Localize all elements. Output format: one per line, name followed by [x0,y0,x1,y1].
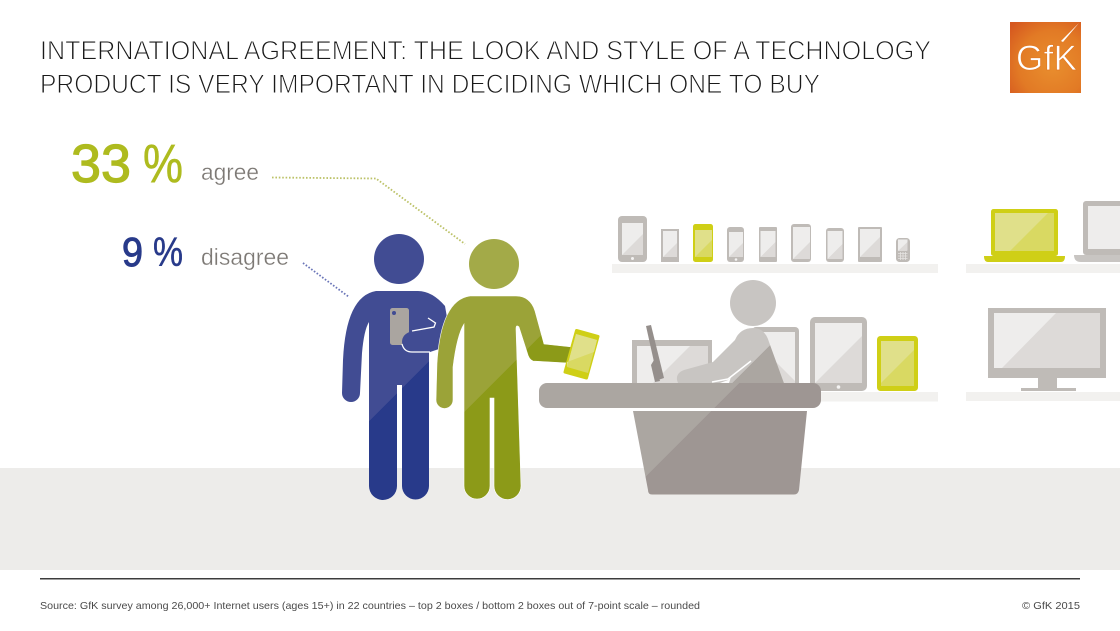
device: green laptop [984,209,1065,262]
stat: 33% agree: agree [201,159,259,185]
green person's phone [565,330,598,378]
GfK logo: GfK [1016,39,1077,78]
counter base [633,411,807,494]
counter top [539,383,821,408]
scanner [646,325,664,382]
stat: 9% disagree [122,229,289,275]
heading: PRODUCT IS VERY IMPORTANT IN DECIDING WHICH ONE TO BUY [40,69,820,99]
GfK logo [1010,22,1081,93]
lower shelf [800,392,938,402]
device: grey laptop [1074,201,1120,262]
footer rule [40,578,1080,580]
counter [539,383,821,494]
copyright: © GfK 2015 [1022,600,1080,612]
right lower shelf: monitor [966,308,1120,401]
clerk torso [728,328,785,386]
heading [40,36,931,99]
device: phablet [858,227,882,262]
device: phone 6 [791,224,811,262]
dotted leader: agree [272,178,465,244]
device: phone 7 [826,228,844,262]
clerk figure [677,280,785,386]
stat: 9% disagree: disagree [201,244,289,270]
device: keypad phone [896,238,910,262]
blue body [342,291,452,500]
upper shelf: phones [612,216,938,273]
green tablet [877,336,918,391]
blue forearm [402,318,448,352]
green person: agree [436,239,598,500]
right upper shelf: laptops [966,201,1120,273]
clerk arm [677,338,752,386]
device: phone 4 [727,227,744,262]
device: phone 5 [759,227,777,262]
blue person's phone [390,308,409,345]
stat: 9% disagree: 9 [122,229,143,275]
source note: Source: GfK survey among 26,000+ Internet users (ages 15+) in 22 countries – top 2 boxes / bottom 2 boxes out of 7-point scale – rounded [40,600,700,612]
device: phone 2 [661,229,679,262]
stat: 9% disagree: % [153,229,183,275]
dotted leader: disagree [303,263,349,297]
blue person: disagree [342,234,452,500]
large tablet [810,317,867,391]
clerk's laptop [632,340,712,386]
stat: 33% agree [71,134,259,194]
stat: 33% agree: % [143,134,183,194]
green body [436,296,572,500]
floor band [0,468,1120,570]
tablet behind clerk [752,327,799,387]
device: green phone [693,224,713,262]
stat: 33% agree: 33 [71,134,131,194]
device: tablet small [618,216,647,262]
device: monitor [988,308,1106,391]
heading: INTERNATIONAL AGREEMENT: THE LOOK AND STYLE OF A TECHNOLOGY [40,36,931,66]
